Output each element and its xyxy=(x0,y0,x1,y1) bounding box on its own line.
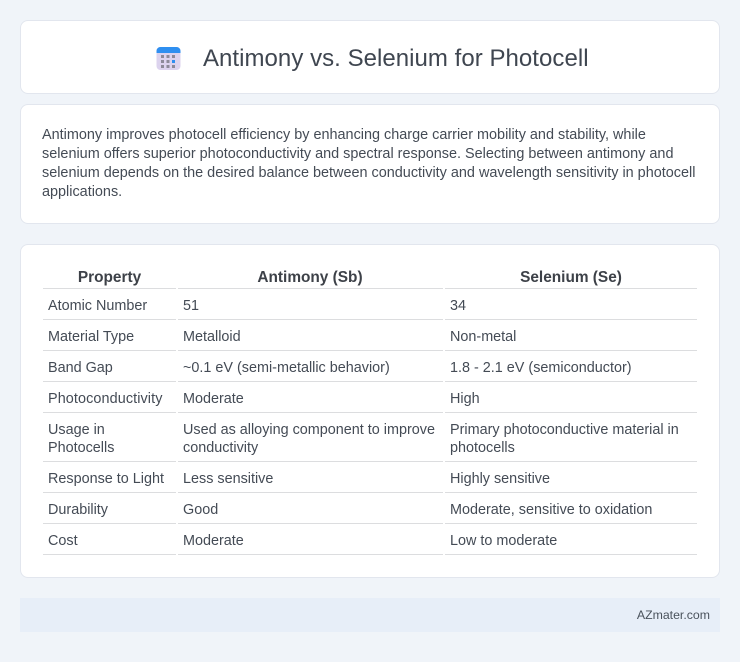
row: durability: Moderate, sensitive to oxidation xyxy=(450,502,652,518)
title card xyxy=(20,20,720,94)
row: usage in photocells: Primary photoconductive material in xyxy=(450,422,679,438)
row: band gap xyxy=(48,360,632,376)
row: photoconductivity: High xyxy=(450,391,480,407)
row: photoconductivity xyxy=(48,391,480,407)
row: usage in photocells: Photocells xyxy=(48,440,114,456)
row: material type xyxy=(48,329,516,345)
table header xyxy=(78,269,622,286)
row: band gap: 1.8 - 2.1 eV (semiconductor) xyxy=(450,360,632,376)
intro paragraph: selenium offers superior photoconductivity and spectral response. Selecting between antimony and xyxy=(42,146,673,162)
row: usage in photocells: photocells xyxy=(450,440,515,456)
row: band gap: ~0.1 eV (semi-metallic behavior) xyxy=(183,360,390,376)
row: usage in photocells xyxy=(48,422,679,456)
row: usage in photocells: conductivity xyxy=(183,440,258,456)
row: photoconductivity: Photoconductivity xyxy=(48,391,162,407)
intro paragraph xyxy=(42,127,695,200)
comparison table xyxy=(43,269,697,555)
row: material type: Non-metal xyxy=(450,329,516,345)
row: response to light xyxy=(48,471,550,487)
row: durability: Good xyxy=(183,502,218,518)
row: response to light: Less sensitive xyxy=(183,471,273,487)
table header: Antimony (Sb) xyxy=(257,269,363,286)
intro paragraph: selenium depends on the desired balance between conductivity and wavelength sensitivity in photocell xyxy=(42,165,695,181)
intro paragraph: Antimony improves photocell efficiency by enhancing charge carrier mobility and stability, while xyxy=(42,127,646,143)
row: atomic number: Atomic Number xyxy=(48,298,147,314)
row: cost xyxy=(48,533,557,549)
row: durability: Durability xyxy=(48,502,108,518)
footer bar xyxy=(20,598,720,632)
row: band gap: Band Gap xyxy=(48,360,113,376)
row: durability xyxy=(48,502,652,518)
row: usage in photocells: Usage in xyxy=(48,422,105,438)
row: material type: Material Type xyxy=(48,329,134,345)
row: photoconductivity: Moderate xyxy=(183,391,244,407)
title: Antimony vs. Selenium for Photocell xyxy=(203,45,589,72)
row: atomic number: 34 xyxy=(450,298,466,314)
footer credit: AZmater.com xyxy=(637,608,710,622)
row: material type: Metalloid xyxy=(183,329,241,345)
row: response to light: Response to Light xyxy=(48,471,164,487)
intro paragraph: applications. xyxy=(42,184,122,200)
table header: Selenium (Se) xyxy=(520,269,622,286)
comparison table panel xyxy=(20,244,720,578)
table header: Property xyxy=(78,269,141,286)
intro text panel xyxy=(20,104,720,224)
icon: calendar xyxy=(156,47,180,70)
row: cost: Moderate xyxy=(183,533,244,549)
row: response to light: Highly sensitive xyxy=(450,471,550,487)
row: cost: Low to moderate xyxy=(450,533,557,549)
row: atomic number xyxy=(48,298,466,314)
row: usage in photocells: Used as alloying component to improve xyxy=(183,422,435,438)
row: atomic number: 51 xyxy=(183,298,199,314)
row: cost: Cost xyxy=(48,533,78,549)
